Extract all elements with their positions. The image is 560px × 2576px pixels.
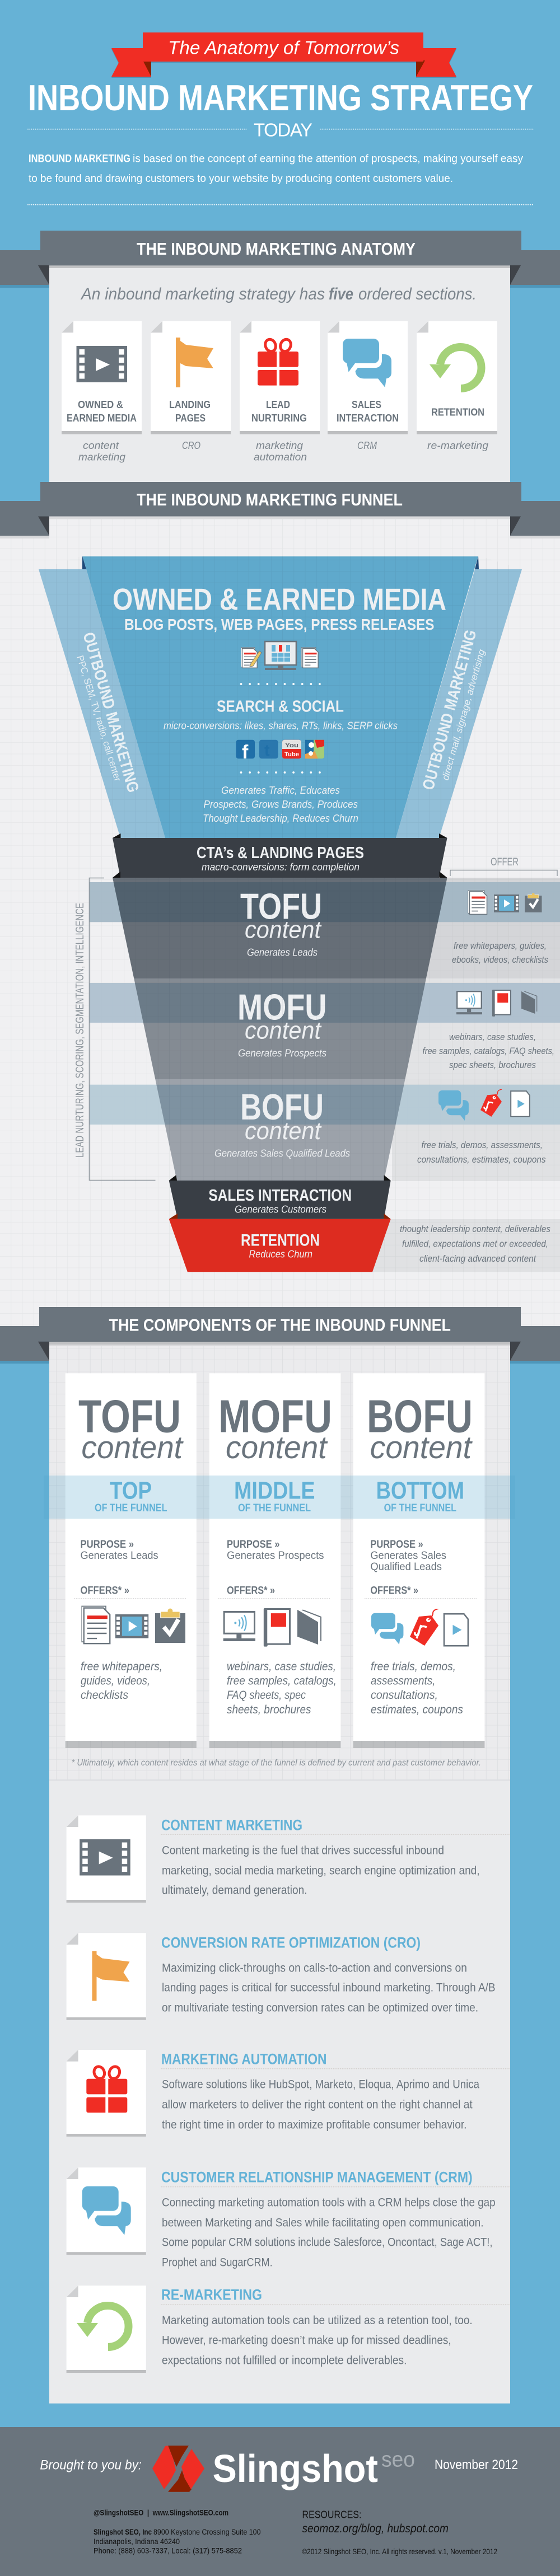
funnel stage: mofu: Generates Prospects [238, 1048, 326, 1059]
definition: marketing automation [67, 2050, 510, 2137]
funnel stage: bofu: BOFU [240, 1086, 324, 1127]
column: mofu: MOFU [218, 1390, 332, 1442]
band: funnel positions: TOP [110, 1478, 152, 1505]
label: lead nurturing bracket: LEAD NURTURING, SCORING, SEGMENTATION, INTELLIGENCE [73, 903, 86, 1158]
outbound strip: left [39, 569, 165, 838]
banner: the components of the inbound funnel [38, 1307, 521, 1361]
text: date: November 2012 [435, 2457, 518, 2472]
icons: blog post, web page, press release [241, 641, 318, 670]
heading: owned and earned media: OWNED & EARNED MEDIA [113, 582, 446, 616]
contact details: Slingshot SEO, Inc [94, 2527, 152, 2536]
funnel stage: mofu [134, 978, 426, 1079]
outbound strip: right: direct mail, signage, advertising [440, 648, 487, 781]
banner: the inbound marketing anatomy [38, 231, 521, 285]
funnel stage: sales interaction: Generates Customers [235, 1204, 326, 1215]
offer side panels and bands [89, 878, 560, 1272]
band: funnel positions [44, 1476, 515, 1519]
definition: customer relationship management: CUSTOMER RELATIONSHIP MANAGEMENT (CRM) [161, 2168, 473, 2185]
column: mofu: free samples, catalogs, [227, 1674, 337, 1687]
icons: social networks: t [264, 742, 270, 760]
contact details [94, 2508, 261, 2555]
column: tofu: free whitepapers, [81, 1660, 162, 1673]
column: bofu: Generates Sales [370, 1550, 446, 1562]
column: bofu: OFFERS* » [370, 1585, 418, 1597]
icons: social networks: You [285, 742, 298, 749]
column: mofu: PURPOSE » [227, 1538, 279, 1551]
card: owned and earned media: EARNED MEDIA [67, 412, 137, 424]
definition: conversion rate optimization [67, 1933, 496, 2020]
card: lead nurturing [240, 321, 320, 462]
card: sales interaction: CRM [357, 440, 377, 451]
offers: retention [400, 1224, 550, 1264]
outbound strip: left: OUTBOUND MARKETING [79, 630, 142, 794]
offers: retention: client-facing advanced content [419, 1253, 536, 1264]
band: funnel positions: MIDDLE [234, 1478, 315, 1505]
column: bofu [353, 1373, 484, 1748]
resources: RESOURCES: [302, 2508, 361, 2520]
funnel stage: sales interaction: SALES INTERACTION [208, 1187, 352, 1205]
text: brought to you by: Brought to you by: [40, 2458, 142, 2473]
banner: the components of the inbound funnel: THE COMPONENTS OF THE INBOUND FUNNEL [109, 1315, 451, 1334]
funnel stage: bofu [155, 1079, 405, 1181]
column: mofu: OFFERS* » [227, 1585, 275, 1597]
funnel stage: bofu: content [245, 1117, 322, 1145]
funnel stage: sales interaction [169, 1175, 391, 1219]
definition: re-marketing: However, re-marketing doesn’t make up for missed deadlines, [162, 2334, 451, 2347]
definition: customer relationship management: Some popular CRM solutions include Salesforce, Oncontact, Sage ACT!, [162, 2236, 493, 2249]
band: funnel positions: OF THE FUNNEL [95, 1502, 167, 1514]
column: mofu: content [226, 1430, 328, 1465]
contact details: 8900 Keystone Crossing Suite 100 [153, 2527, 261, 2536]
offers: mofu [422, 990, 554, 1070]
definition: content marketing: Content marketing is the fuel that drives successful inbound [162, 1844, 444, 1857]
band: funnel positions: OF THE FUNNEL [238, 1502, 311, 1514]
definition: re-marketing [67, 2285, 510, 2373]
definition: conversion rate optimization: or multivariate testing conversion rates can be optimized over time. [162, 2001, 478, 2014]
intro sentence: five ordered sections: An inbound marketing strategy has [80, 285, 325, 303]
funnel stage: mofu: MOFU [237, 987, 327, 1028]
intro sentence: five ordered sections: five [329, 285, 353, 303]
funnel stage: cta's and landing pages: macro-conversions: form completion [202, 861, 360, 873]
heading: owned and earned media [113, 582, 446, 633]
icons: social networks: Tube [284, 751, 299, 758]
heading: search and social [164, 698, 398, 732]
intro sentence: five ordered sections: ordered sections. [358, 285, 477, 303]
banner band: anatomy [0, 250, 560, 288]
outbound strip: left: PPC, SEM, TV, radio, call center [74, 654, 123, 783]
definition: conversion rate optimization: CONVERSION RATE OPTIMIZATION (CRO) [161, 1934, 421, 1951]
column: bofu: consultations, [371, 1689, 438, 1702]
intro paragraph: is based on the concept of earning the attention of prospects, making yourself easy [133, 152, 523, 165]
resources [302, 2508, 497, 2556]
logo: slingshot seo: Slingshot [213, 2447, 378, 2490]
text: benefits [203, 785, 358, 824]
text: benefits: Prospects, Grows Brands, Produces [204, 799, 358, 810]
column: bofu: assessments, [371, 1674, 435, 1687]
label: offer bracket: OFFER [491, 856, 519, 868]
column: mofu: Generates Prospects [227, 1550, 324, 1562]
column: tofu: OFFERS* » [81, 1585, 129, 1597]
contact details: @SlingshotSEO | www.SlingshotSEO.com [94, 2508, 228, 2517]
banner band: components [0, 1326, 560, 1364]
definition: re-marketing: Marketing automation tools can be utilized as a retention tool, too. [162, 2314, 473, 2327]
contact details: Indianapolis, Indiana 46240 [94, 2537, 180, 2546]
outbound strip: right [396, 569, 522, 838]
subtitle: today: TODAY [254, 119, 312, 140]
column: bofu: content [370, 1430, 473, 1465]
funnel stage: retention [169, 1214, 391, 1272]
resources: ©2012 Slingshot SEO, Inc. All rights reserved. v.1, November 2012 [302, 2547, 497, 2556]
card: landing pages [151, 321, 231, 451]
definition: marketing automation: MARKETING AUTOMATION [161, 2051, 327, 2068]
column: mofu: FAQ sheets, spec [227, 1689, 306, 1702]
definition: customer relationship management: Connecting marketing automation tools with a CRM helps close the gap [162, 2196, 496, 2209]
grid background: funnel section [0, 482, 560, 1329]
definition: marketing automation: the right time in order to maximize profitable consumer behavior. [162, 2118, 467, 2131]
funnel stage: cta's and landing pages [113, 833, 447, 878]
label: lead nurturing bracket [73, 878, 156, 1180]
offers: bofu: consultations, estimates, coupons [417, 1154, 546, 1165]
card: owned and earned media: content [83, 440, 119, 451]
funnel stage: tofu: Generates Leads [247, 947, 318, 958]
outbound strip: right: OUTBOUND MARKETING [419, 628, 480, 792]
card: landing pages: LANDING [169, 399, 211, 410]
intro paragraph: to be found and drawing customers to your website by producing content customers value. [29, 172, 453, 185]
offers: mofu: webinars, case studies, [449, 1032, 536, 1042]
definition: re-marketing: RE-MARKETING [161, 2287, 262, 2303]
funnel stage: bofu: Generates Sales Qualified Leads [214, 1148, 350, 1159]
card: lead nurturing: NURTURING [251, 412, 307, 424]
definition: conversion rate optimization: landing pages is critical for successful inbound marketing. Through A/B [162, 1982, 496, 1994]
definition: marketing automation: Software solutions like HubSpot, Marketo, Eloqua, Aprimo and Unica [162, 2078, 479, 2091]
column: mofu: webinars, case studies, [227, 1660, 336, 1673]
column: mofu [209, 1373, 340, 1748]
ribbon: the anatomy of tomorrow's [111, 32, 456, 78]
definition: conversion rate optimization: Maximizing click-throughs on calls-to-action and conversions on [162, 1961, 467, 1974]
logo: slingshot seo: seo [381, 2448, 415, 2472]
card: lead nurturing: automation [254, 451, 307, 462]
banner: the inbound marketing funnel: THE INBOUND MARKETING FUNNEL [137, 490, 403, 509]
offers: tofu [452, 891, 548, 965]
offers: bofu [417, 1089, 546, 1165]
card: retention [417, 321, 497, 451]
definition: re-marketing: expectations not fulfilled or incomplete deliverables. [162, 2354, 407, 2367]
definition: content marketing: ultimately, demand generation. [162, 1884, 307, 1896]
intro sentence: five ordered sections [80, 285, 477, 303]
heading: search and social: micro-conversions: likes, shares, RTs, links, SERP clicks [164, 720, 398, 732]
column: bofu: Qualified Leads [370, 1561, 442, 1573]
column: bofu: BOFU [367, 1390, 473, 1442]
card: sales interaction: SALES [352, 399, 381, 410]
funnel stage: cta's and landing pages: CTA’s & LANDING PAGES [197, 844, 364, 862]
label: offer bracket [450, 856, 557, 876]
funnel stage: retention: RETENTION [241, 1231, 320, 1250]
column: tofu: checklists [81, 1689, 128, 1702]
band: funnel positions: OF THE FUNNEL [384, 1502, 456, 1514]
definition: customer relationship management: between Marketing and Sales while facilitating open communication. [162, 2216, 484, 2229]
definition: customer relationship management: Prophet and SugarCRM. [162, 2256, 273, 2269]
offers: bofu: free trials, demos, assessments, [421, 1140, 543, 1150]
card: lead nurturing: marketing [256, 440, 303, 451]
funnel stage: tofu: TOFU [240, 886, 322, 927]
heading: owned and earned media: BLOG POSTS, WEB PAGES, PRESS RELEASES [124, 616, 435, 633]
column: bofu: estimates, coupons [371, 1703, 463, 1716]
column: tofu: TOFU [78, 1390, 181, 1442]
offers: mofu: spec sheets, brochures [449, 1060, 536, 1070]
heading: search and social: SEARCH & SOCIAL [217, 698, 344, 716]
card: owned and earned media [62, 321, 142, 462]
card: owned and earned media: marketing [78, 451, 125, 462]
definition: content marketing: marketing, social media marketing, search engine optimization and, [162, 1864, 479, 1877]
offers: tofu: free whitepapers, guides, [454, 940, 547, 951]
column: tofu: guides, videos, [81, 1674, 150, 1687]
intro paragraph: INBOUND MARKETING [29, 152, 130, 165]
text: benefits: Generates Traffic, Educates [221, 785, 340, 796]
card: landing pages: CRO [182, 440, 200, 451]
card: retention: RETENTION [431, 406, 484, 418]
icons: social networks [236, 740, 324, 763]
banner: the inbound marketing funnel [38, 482, 521, 536]
banner: the inbound marketing anatomy: THE INBOUND MARKETING ANATOMY [137, 239, 416, 259]
card: lead nurturing: LEAD [266, 399, 290, 410]
contact details: Phone: (888) 603-7337, Local: (317) 575-8852 [94, 2546, 242, 2555]
definition: content marketing [67, 1815, 510, 1903]
definition: marketing automation: allow marketers to deliver the right content on the right channel at [162, 2099, 473, 2111]
text: benefits: Thought Leadership, Reduces Churn [203, 813, 358, 824]
panel: inbound marketing anatomy [49, 265, 510, 483]
offers: tofu: ebooks, videos, checklists [452, 954, 548, 965]
column: bofu: PURPOSE » [370, 1538, 423, 1551]
ribbon: the anatomy of tomorrow's: The Anatomy of Tomorrow’s [168, 38, 399, 58]
definition: customer relationship management [67, 2167, 510, 2269]
card: landing pages: PAGES [175, 412, 206, 424]
band: funnel positions: BOTTOM [376, 1478, 464, 1505]
funnel stage: mofu: content [245, 1017, 322, 1045]
card: owned and earned media: OWNED & [78, 399, 123, 410]
card: retention: re-marketing [427, 440, 488, 451]
icons: social networks: f [242, 742, 249, 763]
column: bofu: free trials, demos, [371, 1660, 456, 1673]
intro paragraph [28, 152, 533, 205]
column: mofu: sheets, brochures [227, 1703, 311, 1716]
panel: definitions [49, 1779, 510, 2404]
column: tofu: PURPOSE » [81, 1538, 134, 1551]
logo: slingshot seo [152, 2446, 415, 2492]
definition: content marketing: CONTENT MARKETING [161, 1816, 302, 1833]
card: sales interaction [328, 321, 408, 451]
panel: components of the inbound funnel [0, 1329, 515, 2576]
funnel stage: retention: Reduces Churn [249, 1249, 312, 1260]
banner band: funnel [0, 501, 560, 538]
card: sales interaction: INTERACTION [337, 412, 399, 424]
column: tofu: content [81, 1430, 184, 1465]
footnote: * Ultimately, which content resides at what stage of the funnel is defined by current and past customer behavior. [72, 1758, 481, 1768]
funnel: owned and earned media [0, 554, 560, 840]
funnel stage: tofu [113, 878, 447, 978]
column: tofu: Generates Leads [81, 1550, 158, 1562]
funnel stage: tofu: content [245, 916, 322, 944]
footer [0, 2427, 560, 2576]
column: tofu [66, 1373, 197, 1748]
resources: seomoz.org/blog, hubspot.com [302, 2522, 449, 2535]
